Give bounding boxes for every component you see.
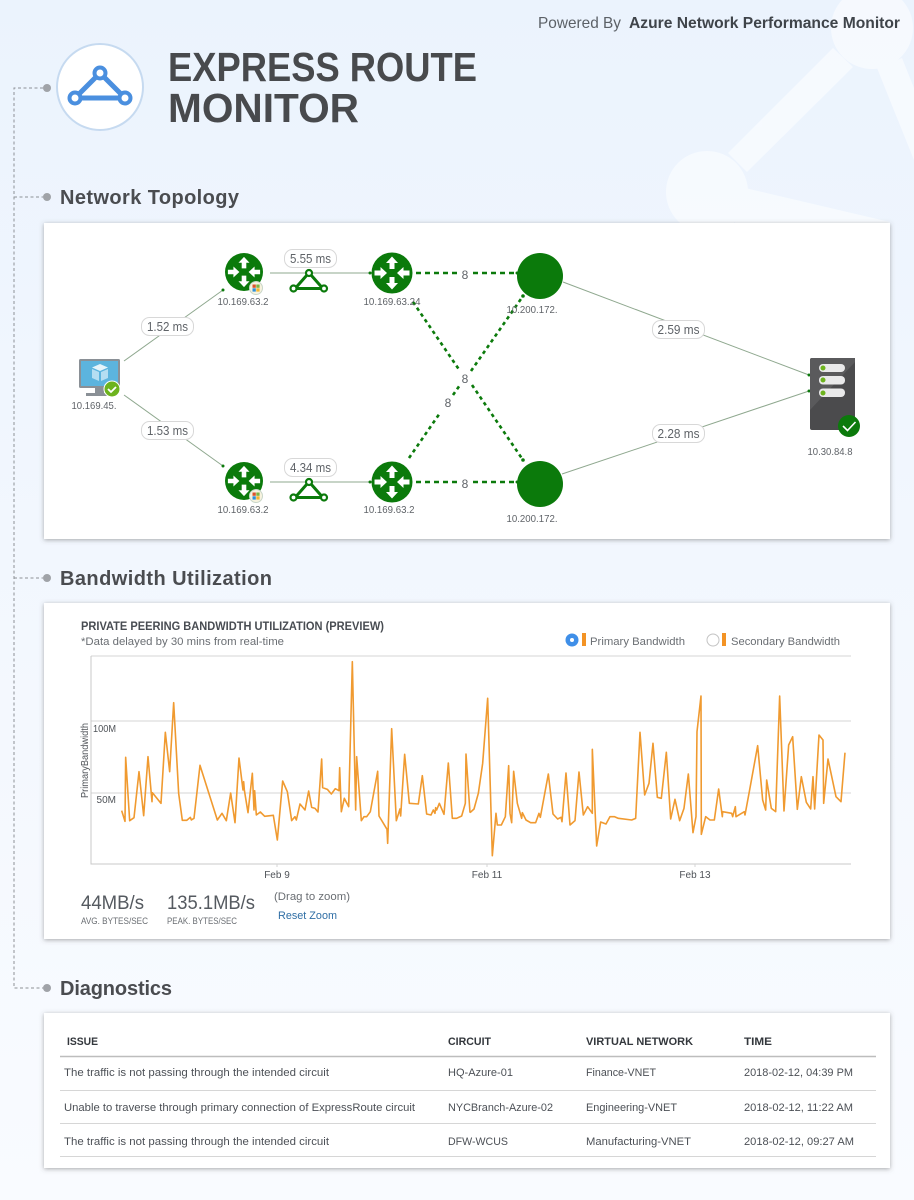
table row 1: Finance-VNET (586, 1067, 656, 1079)
table row 2: Engineering-VNET (586, 1102, 677, 1114)
link labels: hop count: 8 (462, 477, 469, 491)
latency labels (142, 250, 704, 476)
table row 1: The traffic is not passing through the intended circuit (64, 1067, 329, 1079)
link labels: hop count: 8 (445, 396, 452, 410)
node IP labels (72, 296, 853, 525)
thin links (124, 273, 809, 482)
legend (566, 633, 840, 648)
latency labels: 4.34 ms (290, 460, 331, 475)
node IP labels: 10.200.172. (506, 513, 558, 525)
table rules (60, 1056, 876, 1156)
axis labels: Feb 11 (472, 870, 503, 881)
panel: bandwidth utilization (44, 603, 890, 939)
node: router bottom 1 (225, 462, 263, 502)
table row 2: NYCBranch-Azure-02 (448, 1102, 553, 1114)
icon: circuit triangle top (290, 270, 327, 292)
node: peer bottom (517, 461, 563, 507)
zoom controls: Reset Zoom (278, 910, 337, 922)
zoom controls: (Drag to zoom) (274, 891, 350, 903)
powered-by header: Powered By (538, 15, 621, 32)
table row 2: 2018-02-12, 11:22 AM (744, 1102, 853, 1114)
bandwidth series (122, 662, 845, 856)
axis labels: PrimaryBandwidth (80, 723, 91, 798)
legend: Primary Bandwidth (590, 636, 685, 648)
table header: TIME (744, 1036, 772, 1048)
table header (67, 1036, 772, 1048)
axis labels: 100M (93, 724, 116, 735)
node: router top 1 (225, 253, 263, 294)
dashed links (409, 273, 523, 482)
stat: peak (167, 892, 255, 926)
title: MONITOR (168, 85, 359, 131)
icon: circuit triangle bottom (290, 479, 327, 500)
link end dots (222, 272, 810, 484)
axis labels (80, 723, 711, 881)
table row 3 (64, 1136, 854, 1148)
table row 1: HQ-Azure-01 (448, 1067, 513, 1079)
heading: network topology: Network Topology (60, 187, 240, 209)
table header: VIRTUAL NETWORK (586, 1036, 693, 1048)
link labels: hop count (445, 268, 469, 491)
link labels: hop count: 8 (462, 372, 469, 386)
icon: server (810, 358, 860, 437)
stat: average: 44MB/s (81, 892, 144, 914)
table row 3: The traffic is not passing through the intended circuit (64, 1136, 329, 1148)
stat: peak: 135.1MB/s (167, 892, 255, 914)
node: router bottom 2 (372, 462, 412, 502)
logo icon (43, 44, 143, 130)
stat: average (81, 892, 148, 926)
heading: diagnostics: Diagnostics (60, 978, 172, 1000)
axis labels: Feb 9 (264, 870, 290, 881)
latency labels: 5.55 ms (290, 251, 331, 266)
stat: average: AVG. BYTES/SEC (81, 916, 148, 926)
table row 3: DFW-WCUS (448, 1136, 508, 1148)
table row 3: Manufacturing-VNET (586, 1136, 691, 1148)
title (168, 44, 477, 131)
chart axes and grid (91, 656, 851, 867)
chart subtitle: *Data delayed by 30 mins from real-time (81, 636, 284, 648)
node IP labels: 10.169.63.2 (218, 296, 269, 308)
legend: Secondary Bandwidth (731, 636, 840, 648)
table row 3: 2018-02-12, 09:27 AM (744, 1136, 854, 1148)
table header: CIRCUIT (448, 1036, 491, 1048)
node IP labels: 10.169.63.2 (364, 504, 415, 516)
latency labels: 2.59 ms (658, 322, 700, 337)
table row 2: Unable to traverse through primary connection of ExpressRoute circuit (64, 1102, 415, 1114)
node IP labels: 10.169.63.24 (364, 296, 421, 308)
node: router top 2 (372, 252, 412, 294)
node IP labels: 10.169.63.2 (218, 504, 269, 516)
panel: network topology (44, 223, 890, 539)
stat: peak: PEAK. BYTES/SEC (167, 916, 237, 926)
axis labels: 50M (97, 795, 116, 806)
powered-by header: Azure Network Performance Monitor (629, 15, 900, 32)
axis labels: Feb 13 (679, 870, 711, 881)
latency labels: 1.52 ms (147, 319, 188, 334)
latency labels: 1.53 ms (147, 423, 188, 438)
table row 1 (64, 1067, 853, 1079)
panel: diagnostics (44, 1013, 890, 1168)
link labels: hop count: 8 (462, 268, 469, 282)
table row 2 (64, 1102, 853, 1114)
heading: bandwidth utilization: Bandwidth Utilization (60, 568, 272, 590)
table row 1: 2018-02-12, 04:39 PM (744, 1067, 853, 1079)
title: EXPRESS ROUTE (168, 44, 477, 90)
node IP labels: 10.200.172. (506, 304, 558, 316)
node IP labels: 10.169.45. (72, 400, 116, 412)
chart title: PRIVATE PEERING BANDWIDTH UTILIZATION (PREVIEW) (81, 619, 384, 633)
icon: virtual machine (79, 359, 120, 397)
latency labels: 2.28 ms (658, 426, 700, 441)
table header: ISSUE (67, 1036, 98, 1048)
line chart (80, 656, 851, 881)
background network watermark (666, 0, 914, 240)
node IP labels: 10.30.84.8 (808, 446, 853, 458)
node: peer top (517, 253, 563, 299)
dashed connector line (14, 88, 43, 988)
zoom controls (274, 891, 350, 922)
